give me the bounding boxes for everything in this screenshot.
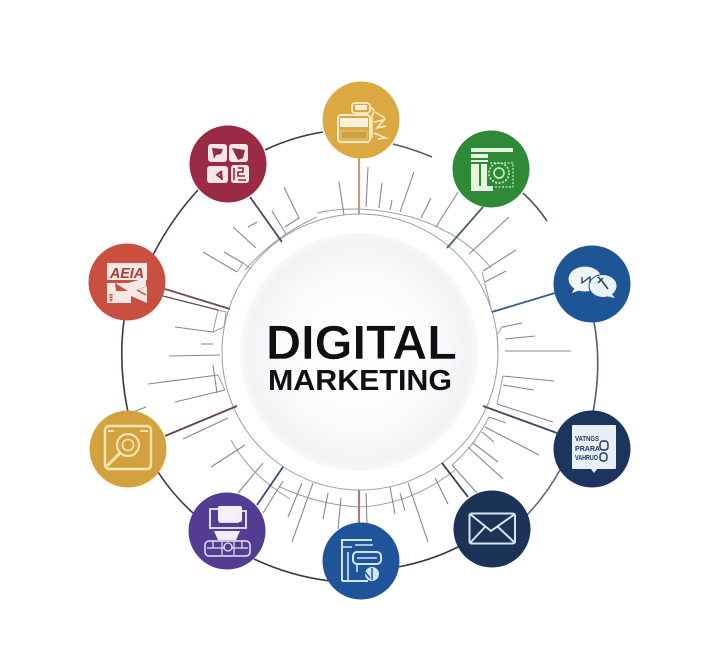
icon: navy survey screen (554, 410, 630, 488)
title: digital: DIGITAL (266, 317, 457, 370)
icon: blue bottom document and printer (322, 522, 400, 600)
inner ring arcs (213, 209, 505, 507)
icon: blue chat bubbles (554, 246, 630, 322)
coloured connector stems (163, 157, 557, 523)
radial spokes (133, 167, 571, 542)
icon: navy survey screen: PRARA (575, 446, 600, 453)
centre disc (240, 233, 478, 471)
icon: green browser window (452, 130, 530, 208)
title: marketing: MARKETING (268, 365, 452, 397)
icon: crimson tiles (190, 126, 266, 202)
icon: navy envelope (454, 490, 530, 568)
icon: navy survey screen: VATNGS (575, 436, 599, 443)
icon: navy survey screen: VAHRUO (575, 455, 598, 462)
icon: ochre camera search (90, 410, 166, 488)
icon: yellow content card (322, 82, 400, 158)
icon: purple computer and keyboard (188, 492, 266, 570)
icon: red banner and megaphone hand: AEIA (109, 265, 144, 282)
icon: red banner and megaphone hand (88, 244, 166, 320)
outer ring arcs (122, 132, 598, 581)
